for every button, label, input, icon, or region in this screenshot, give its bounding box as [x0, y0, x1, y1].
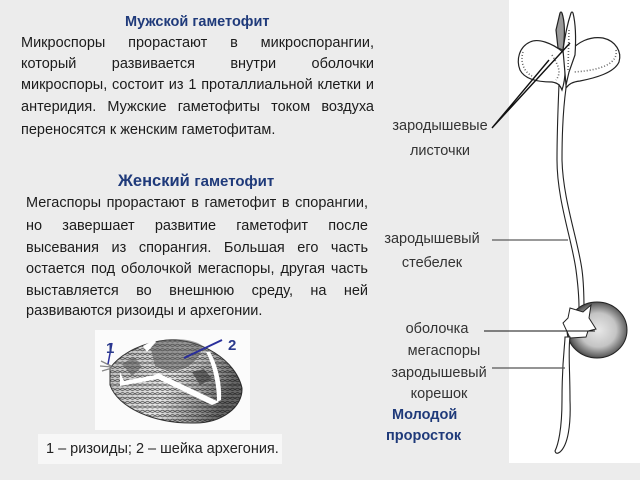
label: embryonic root: зародышевый [391, 365, 487, 381]
label: embryonic leaves: зародышевые [392, 118, 488, 134]
title: female gametophyte: Женский гаметофит [118, 172, 274, 190]
text block: male gametophyte description: который развивается внутри оболочки [21, 56, 374, 72]
text block: female gametophyte description: Мегаспоры прорастают в гаметофит в спорангии, [26, 195, 368, 211]
caption: legend for numbers: 1 – ризоиды; 2 – шейка архегония. [46, 441, 279, 457]
pointer 1 [108, 343, 112, 364]
pointer 2 [184, 340, 222, 358]
text block: female gametophyte description: высевания из спорангия. Большая его часть [26, 240, 368, 256]
label: megaspore shell: мегаспоры [408, 343, 480, 359]
icon: rhizoids [100, 361, 112, 371]
label: megaspore shell [406, 321, 480, 359]
text block: male gametophyte description: антеридия. Мужские гаметофиты током воздуха [21, 99, 374, 115]
caption: legend for numbers [38, 434, 282, 464]
label: embryonic stem [384, 231, 480, 271]
root [555, 337, 570, 453]
title: young seedling: Молодой [392, 407, 457, 423]
megaspore [563, 302, 627, 358]
text block: female gametophyte description: развиваются ризоиды и архегонии. [26, 303, 262, 319]
text block: male gametophyte description [21, 35, 374, 138]
label: embryonic root: корешок [411, 386, 467, 402]
label: megaspore shell: оболочка [406, 321, 468, 337]
label 2: 2 [228, 337, 236, 354]
cotyledon shading [522, 30, 616, 80]
illustration: megaspore with gametophyte [95, 330, 250, 430]
stem [557, 84, 584, 310]
text block: male gametophyte description: переносятся к женским гаметофитам. [21, 122, 275, 138]
label: embryonic stem: зародышевый [384, 231, 480, 247]
text block: female gametophyte description: остается под оболочкой мегаспоры, другая часть [26, 261, 368, 277]
label: embryonic leaves [392, 118, 488, 159]
text block: male gametophyte description: Микроспоры прорастают в микроспорангии, [21, 35, 374, 51]
text block: male gametophyte description: микроспоры, состоит из 1 проталлиальной клетки и [21, 77, 374, 93]
cotyledons [518, 12, 620, 90]
text block: female gametophyte description: но завершает развитие гаметофит после [26, 218, 368, 234]
pointer lines [484, 43, 595, 368]
text block: female gametophyte description [26, 195, 368, 319]
label 1: 1 [106, 340, 114, 357]
title: male gametophyte: Мужской гаметофит [125, 14, 270, 30]
text block: female gametophyte description: выставляется во внешнюю среду, на ней [26, 283, 368, 299]
label: embryonic leaves: листочки [410, 143, 470, 159]
spore body [110, 339, 242, 423]
panel: seedling illustration background [509, 0, 640, 463]
title: young seedling: проросток [386, 428, 461, 444]
label: embryonic stem: стебелек [402, 255, 462, 271]
title: young seedling [386, 407, 462, 444]
label: embryonic root [391, 365, 487, 402]
